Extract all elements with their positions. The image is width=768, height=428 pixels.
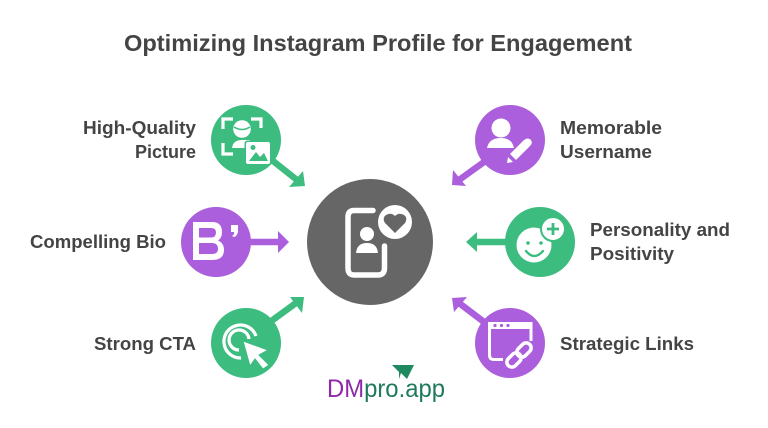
label: Strategic Links	[560, 334, 694, 354]
label: Username	[560, 142, 652, 162]
label: Picture	[135, 142, 196, 162]
label: Strong CTA	[94, 334, 196, 354]
logo: DMpro.app	[327, 365, 445, 403]
icon: portrait and picture	[211, 105, 281, 175]
arrow	[250, 231, 289, 253]
arrow	[452, 297, 484, 322]
arrow	[466, 232, 508, 252]
arrow	[268, 157, 305, 187]
icon: smiley with plus	[505, 207, 575, 277]
title: Optimizing Instagram Profile for Engagement	[124, 30, 632, 56]
label: Personality and	[590, 220, 730, 240]
label: Compelling Bio	[30, 232, 166, 252]
arrow	[452, 162, 484, 186]
icon: user and pencil	[475, 105, 545, 175]
item: Strong CTA	[94, 297, 304, 378]
item: Strategic Links	[452, 297, 694, 378]
center circle with phone icon	[307, 179, 433, 305]
label: High-Quality	[83, 118, 196, 138]
label: Memorable	[560, 118, 662, 138]
label: Positivity	[590, 244, 674, 264]
logo text: DMpro.app	[327, 375, 445, 403]
icon: letter B	[181, 207, 251, 277]
icon: cursor click	[211, 308, 281, 378]
item: Personality and Positivity	[466, 207, 730, 277]
icon: browser with link	[475, 308, 545, 378]
logo icon: paper plane	[392, 365, 414, 379]
item: Compelling Bio	[30, 207, 289, 277]
item: High-Quality Picture	[83, 105, 305, 187]
item: Memorable Username	[452, 105, 662, 186]
arrow	[270, 297, 304, 322]
